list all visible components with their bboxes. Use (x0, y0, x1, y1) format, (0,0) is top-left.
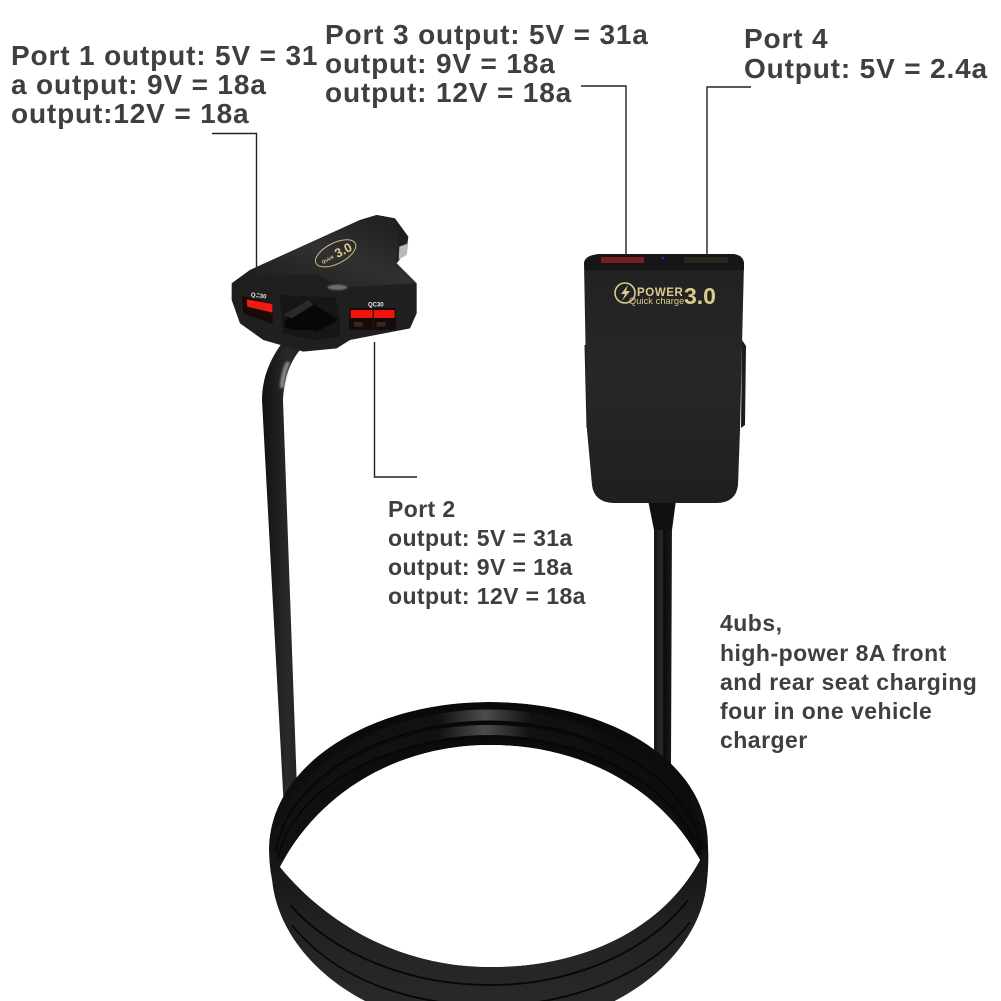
left cable to car charger (262, 327, 313, 810)
cable strain relief (283, 302, 338, 332)
right USB port (349, 302, 396, 330)
left USB port: QC30 (250, 292, 267, 301)
rear hub cable (654, 515, 672, 765)
right USB port: QC30 (368, 302, 384, 308)
leader line: port 2 (374, 342, 417, 477)
label: port 4 (744, 23, 988, 84)
product description: and rear seat charging (720, 669, 977, 695)
label: port 3: output: 9V = 18a (325, 48, 556, 79)
label: port 3: Port 3 output: 5V = 31a (325, 19, 649, 50)
leader line: port 3 (581, 86, 626, 256)
label: port 3 (325, 19, 649, 108)
label: port 3: output: 12V = 18a (325, 77, 572, 108)
product description: 4ubs, (720, 610, 782, 636)
left USB port (242, 292, 273, 324)
rear hub body (584, 254, 744, 503)
plug tip (399, 243, 408, 259)
rear USB port, black (684, 257, 728, 263)
cable coil (269, 702, 708, 1001)
strain relief highlight (283, 300, 313, 318)
rear hub cable collar (648, 500, 676, 530)
QC 3.0 logo (615, 283, 716, 309)
product description (720, 610, 977, 753)
leader line: port 1 (212, 134, 256, 296)
product description: four in one vehicle (720, 698, 932, 724)
leader line: port 4 (707, 87, 751, 256)
rear hub side clips (584, 340, 746, 428)
center recess (279, 295, 340, 340)
QC 3.0 oval logo: Quick (321, 254, 335, 265)
QC 3.0 logo: Quick charge (629, 296, 684, 306)
charger top face (232, 215, 417, 287)
label: port 1: a output: 9V = 18a (11, 69, 267, 100)
QC 3.0 oval logo: 3.0 (332, 240, 354, 261)
rear seat hub (584, 254, 746, 530)
label: port 2: output: 5V = 31a (388, 525, 573, 551)
left cable bend highlight (280, 362, 290, 388)
charger body (232, 215, 417, 352)
product description: charger (720, 727, 808, 753)
label: port 2 (388, 496, 586, 609)
label: port 4: Port 4 (744, 23, 828, 54)
label: port 4: Output: 5V = 2.4a (744, 53, 988, 84)
QC 3.0 logo: 3.0 (684, 283, 716, 309)
front highlight (327, 285, 347, 290)
label: port 1 (11, 40, 318, 129)
QC 3.0 logo: POWER (637, 287, 684, 299)
label: port 2: output: 9V = 18a (388, 554, 573, 580)
label: port 1: Port 1 output: 5V = 31 (11, 40, 318, 71)
label: port 2: output: 12V = 18a (388, 583, 586, 609)
hub top edge (584, 254, 744, 270)
label: port 1: output:12V = 18a (11, 98, 249, 129)
rear USB port, red (601, 257, 644, 263)
product description: high-power 8A front (720, 640, 947, 666)
car charger with two visible ports (232, 215, 417, 352)
label: port 2: Port 2 (388, 496, 456, 522)
indicator LED (662, 257, 664, 259)
QC 3.0 oval logo (311, 234, 360, 273)
